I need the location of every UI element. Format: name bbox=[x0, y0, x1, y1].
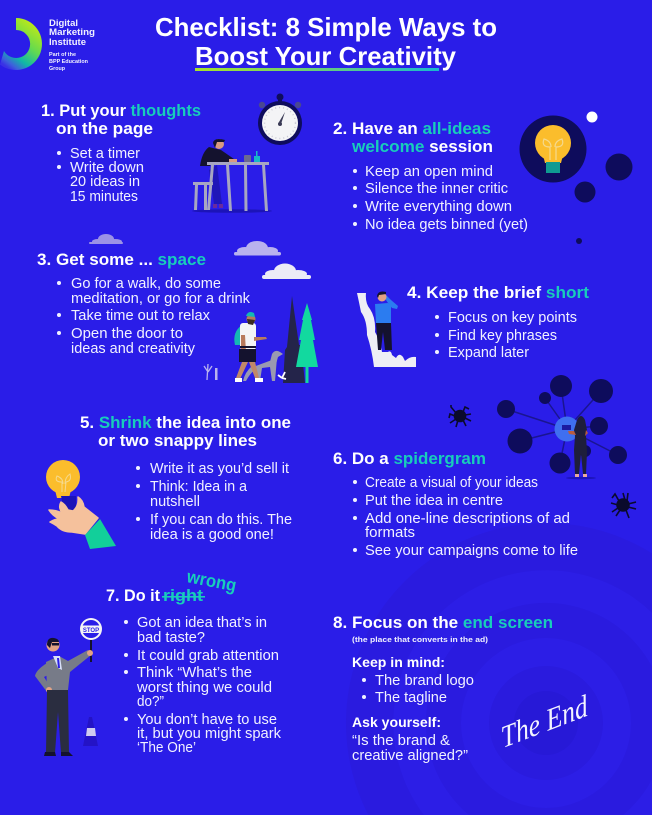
bullets 4: Expand later bbox=[448, 345, 529, 361]
illustration: person on paper scroll bbox=[357, 292, 416, 367]
bullets 3: Take time out to relax bbox=[71, 308, 211, 324]
logo wordmark: Part of the bbox=[49, 52, 76, 58]
title: Boost Your Creativity bbox=[195, 41, 457, 71]
title: Checklist: 8 Simple Ways to bbox=[155, 12, 497, 42]
bullets 7: ‘The One’ bbox=[137, 740, 196, 756]
bullets 1: Set a timer bbox=[70, 146, 140, 162]
panel: step 6 bbox=[333, 375, 627, 559]
bullets 7: Got an idea that’s in bbox=[137, 615, 267, 631]
keep in mind list: Keep in mind: bbox=[352, 655, 445, 670]
bullets 6: Add one-line descriptions of ad bbox=[365, 511, 570, 527]
heading 2: 2. Have an all-ideas bbox=[333, 119, 491, 138]
heading 8: 8. Focus on the end screen bbox=[333, 613, 553, 632]
title bbox=[155, 12, 497, 71]
illustration: person at desk bbox=[192, 139, 272, 213]
panel: step 5 bbox=[46, 413, 292, 549]
logo ring bbox=[0, 18, 42, 70]
heading 3: 3. Get some ... space bbox=[37, 250, 206, 269]
illustration: hand holding bulb bbox=[46, 460, 116, 549]
illustration: spider 2 bbox=[611, 493, 636, 518]
keep in mind list bbox=[352, 655, 474, 706]
heading 1 bbox=[41, 101, 201, 138]
illustration: lightbulb with circles bbox=[520, 112, 632, 244]
illustration: man with stop sign: STOP bbox=[83, 628, 99, 634]
bullets 7: It could grab attention bbox=[137, 648, 279, 664]
heading 7 bbox=[106, 566, 238, 605]
bullets 6 bbox=[353, 475, 578, 559]
bullets 3: Open the door to bbox=[71, 326, 183, 342]
ask yourself text: creative aligned?” bbox=[352, 748, 468, 764]
logo wordmark: Marketing bbox=[49, 27, 95, 38]
heading 1: 1. Put your thoughts bbox=[41, 101, 201, 120]
icon: stopwatch bbox=[258, 94, 302, 145]
logo wordmark bbox=[49, 18, 95, 72]
heading 5: or two snappy lines bbox=[98, 431, 257, 450]
panel: step 7 bbox=[35, 566, 282, 756]
illustration: hiker and dog bbox=[234, 312, 283, 382]
heading 4: 4. Keep the brief short bbox=[407, 283, 589, 302]
heading 8: (the place that converts in the ad) bbox=[352, 635, 489, 644]
bullets 2: No idea gets binned (yet) bbox=[365, 217, 528, 233]
ask yourself text: “Is the brand & bbox=[352, 733, 450, 749]
logo wordmark: BPP Education bbox=[49, 59, 88, 65]
heading 5 bbox=[80, 413, 291, 450]
bullets 5: nutshell bbox=[150, 494, 200, 510]
heading 7: 7. Do it bbox=[106, 586, 160, 605]
The End script: The End bbox=[499, 688, 591, 755]
bullets 7: bad taste? bbox=[137, 630, 205, 646]
heading 2 bbox=[333, 119, 493, 156]
bullets 3 bbox=[57, 276, 251, 357]
panel: step 2 bbox=[333, 112, 632, 244]
bullets 5: If you can do this. The bbox=[150, 512, 292, 528]
bullets 7: Think “What’s the bbox=[137, 665, 252, 681]
keep in mind list: The tagline bbox=[375, 690, 447, 706]
bullets 6: Create a visual of your ideas bbox=[365, 475, 538, 491]
bullets 5: Think: Idea in a bbox=[150, 479, 248, 495]
bullets 6: See your campaigns come to life bbox=[365, 543, 578, 559]
bullets 6: formats bbox=[365, 525, 415, 541]
illustration: traffic cone bbox=[83, 717, 98, 746]
bullets 7: it, but you might spark bbox=[137, 726, 282, 742]
bullets 7: worst thing we could bbox=[136, 680, 272, 696]
bullets 1: 20 ideas in bbox=[70, 174, 140, 190]
heading 8 bbox=[333, 613, 553, 644]
heading 2: welcome session bbox=[351, 137, 493, 156]
logo wordmark: Digital bbox=[49, 18, 78, 29]
panel: step 4 bbox=[357, 283, 589, 367]
heading 7: wrong bbox=[184, 566, 238, 595]
logo wordmark: Group bbox=[49, 66, 65, 72]
bullets 4: Find key phrases bbox=[448, 328, 557, 344]
illustration: spider 1 bbox=[449, 405, 471, 427]
ask yourself text bbox=[352, 715, 468, 764]
illustration: spidergram network bbox=[497, 375, 627, 474]
bullets 3: meditation, or go for a drink bbox=[71, 291, 251, 307]
bullets 7: You don’t have to use bbox=[137, 712, 277, 728]
bullets 4: Focus on key points bbox=[448, 310, 577, 326]
bullets 2: Keep an open mind bbox=[365, 164, 493, 180]
heading 1: on the page bbox=[56, 119, 153, 138]
bullets 4 bbox=[435, 310, 577, 361]
keep in mind list: The brand logo bbox=[375, 673, 474, 689]
bullets 6: Put the idea in centre bbox=[365, 493, 503, 509]
bullets 1: Write down bbox=[70, 160, 144, 176]
bullets 7 bbox=[124, 615, 282, 756]
heading 5: 5. Shrink the idea into one bbox=[80, 413, 291, 432]
heading 6: 6. Do a spidergram bbox=[333, 449, 486, 468]
ask yourself text: Ask yourself: bbox=[352, 715, 441, 730]
bullets 1 bbox=[57, 146, 144, 205]
bullets 5: idea is a good one! bbox=[150, 527, 274, 543]
panel: step 3 bbox=[37, 234, 318, 383]
bullets 2: Write everything down bbox=[365, 199, 512, 215]
concentric rings background bbox=[346, 523, 652, 815]
bullets 2: Silence the inner critic bbox=[365, 181, 508, 197]
illustration: plants bbox=[204, 364, 286, 380]
logo bbox=[0, 18, 95, 72]
bullets 7: do?” bbox=[137, 694, 164, 710]
bullets 3: ideas and creativity bbox=[71, 341, 196, 357]
illustration: woman at spidergram bbox=[566, 416, 596, 479]
bullets 5 bbox=[136, 461, 292, 543]
heading 7: right bbox=[163, 586, 203, 605]
panel: step 8 bbox=[333, 613, 591, 764]
illustration: trees bbox=[283, 296, 318, 383]
bullets 1: 15 minutes bbox=[70, 189, 138, 205]
panel: step 1 bbox=[41, 94, 302, 213]
bullets 3: Go for a walk, do some bbox=[71, 276, 221, 292]
logo wordmark: Institute bbox=[49, 37, 86, 48]
bullets 2 bbox=[353, 164, 528, 233]
bullets 5: Write it as you’d sell it bbox=[150, 461, 289, 477]
illustration: clouds bbox=[89, 234, 311, 279]
illustration: man with stop sign bbox=[35, 618, 102, 756]
